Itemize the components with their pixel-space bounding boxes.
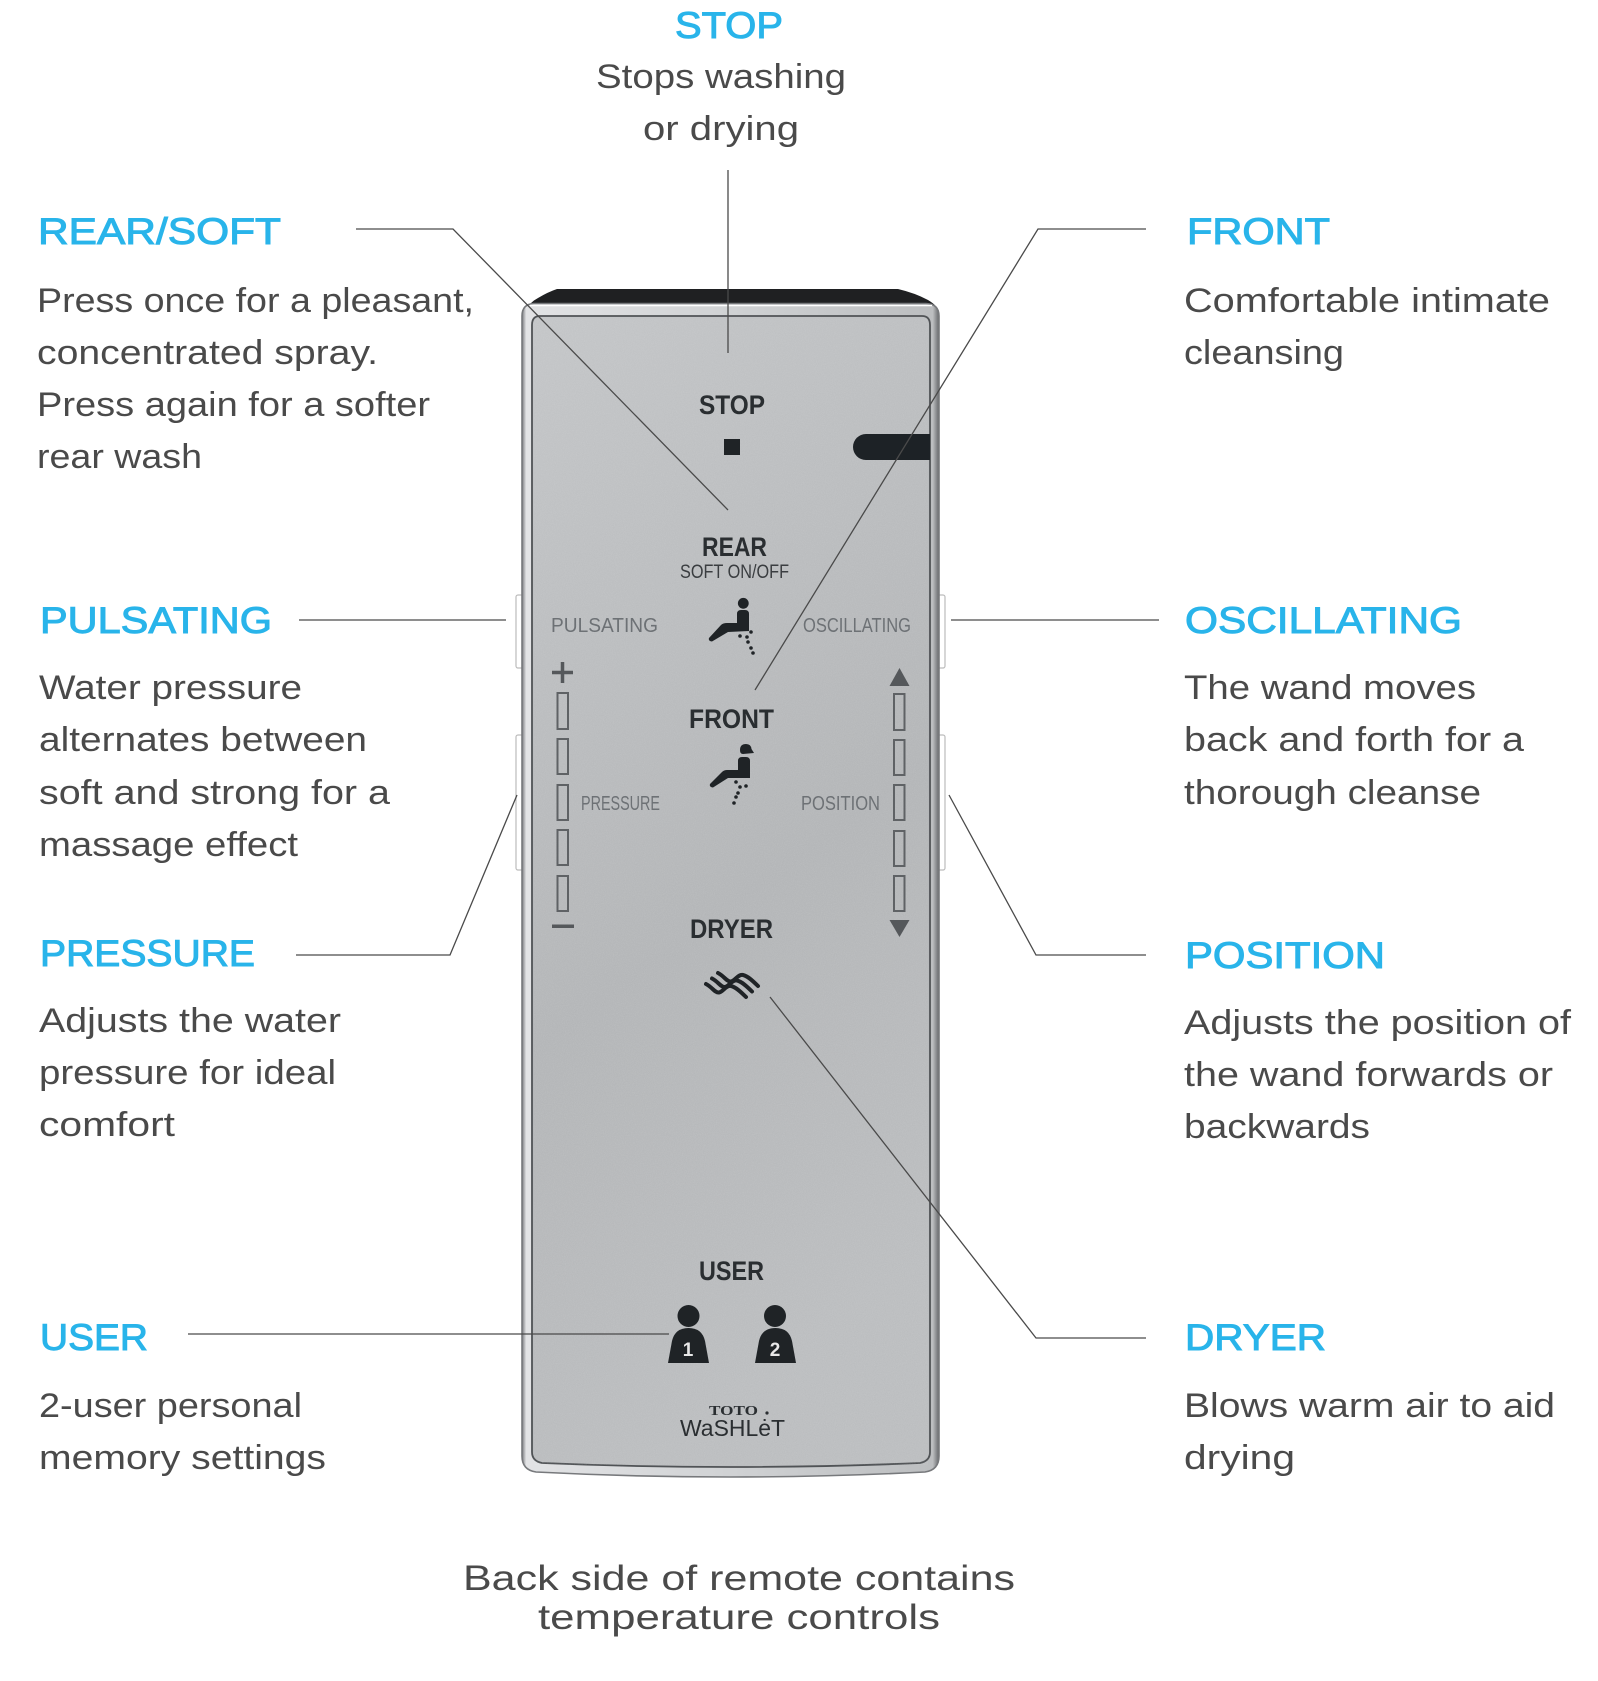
description: STOP: or drying: [643, 110, 799, 148]
heading: FRONT: FRONT: [1187, 211, 1330, 252]
callout: PRESSURE: [39, 933, 341, 1144]
heading: REAR/SOFT: REAR/SOFT: [38, 211, 281, 252]
heading: PRESSURE: PRESSURE: [40, 933, 255, 974]
remote label: PRESSURE: PRESSURE: [581, 793, 660, 815]
dark slider window: [853, 434, 930, 460]
leader line: DRYER: [770, 997, 1146, 1338]
side button: pulsating: [516, 595, 524, 668]
leader line: FRONT: [755, 229, 1146, 690]
description: DRYER: Blows warm air to aid: [1184, 1387, 1555, 1425]
description: PRESSURE: pressure for ideal: [39, 1054, 336, 1092]
description: PULSATING: massage effect: [39, 826, 299, 864]
callout: REAR/SOFT: [37, 211, 474, 476]
heading: USER: USER: [40, 1317, 148, 1358]
description: OSCILLATING: back and forth for a: [1184, 721, 1524, 759]
description: PULSATING: Water pressure: [39, 669, 302, 707]
description: OSCILLATING: [1184, 669, 1524, 812]
stop button icon: [724, 439, 740, 455]
description: PULSATING: alternates between: [39, 721, 367, 759]
description: REAR/SOFT: [37, 282, 474, 476]
description: PRESSURE: Adjusts the water: [39, 1002, 341, 1040]
callout: FRONT: [1184, 211, 1550, 372]
logo: TOTO Washlet: TOTO: [709, 1404, 758, 1419]
logo: TOTO Washlet: WaSHLėT: [680, 1415, 785, 1441]
icon: down arrow: [890, 920, 910, 937]
icon: minus: [552, 924, 574, 928]
heading: DRYER: DRYER: [1185, 1317, 1326, 1358]
heading: PULSATING: PULSATING: [40, 600, 272, 641]
description: STOP: [596, 58, 846, 148]
side button: oscillating: [937, 595, 945, 668]
remote body bezel: [522, 304, 939, 1477]
remote label: FRONT: FRONT: [689, 704, 774, 734]
description: POSITION: backwards: [1184, 1108, 1370, 1146]
icon: plus: [552, 662, 573, 683]
description: USER: memory settings: [39, 1439, 326, 1477]
description: USER: 2-user personal: [39, 1387, 302, 1425]
description: FRONT: Comfortable intimate: [1184, 282, 1550, 320]
footer note: [463, 1559, 1015, 1637]
icon: front wash seated figure: [710, 744, 754, 805]
callout: POSITION: [1184, 935, 1572, 1146]
description: PRESSURE: comfort: [39, 1106, 176, 1144]
callout: USER: [39, 1317, 326, 1477]
heading: POSITION: POSITION: [1185, 935, 1385, 976]
description: POSITION: the wand forwards or: [1184, 1056, 1553, 1094]
leader line: STOP: [727, 170, 729, 353]
description: REAR/SOFT: Press once for a pleasant,: [37, 282, 474, 320]
callout: DRYER: [1184, 1317, 1555, 1477]
leader line: POSITION: [949, 795, 1146, 955]
description: STOP: Stops washing: [596, 58, 846, 96]
icon: user 1: 1: [683, 1340, 694, 1361]
leader line: PULSATING: [299, 619, 506, 621]
leader line: REAR/SOFT: [356, 229, 728, 510]
description: FRONT: [1184, 282, 1550, 372]
leader line: OSCILLATING: [951, 619, 1159, 621]
remote label: DRYER: DRYER: [690, 914, 773, 944]
remote label: STOP: STOP: [699, 390, 765, 420]
bezel top highlight: [530, 304, 932, 306]
description: USER: [39, 1387, 326, 1477]
remote label: SOFT ON/OFF: SOFT ON/OFF: [680, 562, 789, 583]
description: PULSATING: soft and strong for a: [39, 774, 390, 812]
description: FRONT: cleansing: [1184, 334, 1344, 372]
description: REAR/SOFT: concentrated spray.: [37, 334, 378, 372]
callout: OSCILLATING: [1184, 600, 1524, 812]
description: OSCILLATING: The wand moves: [1184, 669, 1476, 707]
leader line: USER: [188, 1333, 669, 1335]
remote control: [516, 289, 945, 1477]
remote label: OSCILLATING: OSCILLATING: [803, 615, 911, 637]
side button: position: [937, 735, 945, 870]
remote label: USER: USER: [699, 1256, 764, 1286]
panel speckle texture: [534, 319, 928, 1465]
description: PRESSURE: [39, 1002, 341, 1144]
description: REAR/SOFT: rear wash: [37, 438, 202, 476]
description: PULSATING: [39, 669, 390, 864]
icon: user 2: 2: [770, 1340, 780, 1361]
leader line: PRESSURE: [296, 795, 517, 955]
remote top dark edge: [524, 289, 939, 312]
side button: pressure: [516, 735, 524, 870]
icon: up arrow: [890, 668, 910, 686]
heading: OSCILLATING: OSCILLATING: [1185, 600, 1462, 641]
icon: rear wash seated figure: [709, 598, 755, 655]
icon: dryer waves: [706, 973, 758, 997]
remote label: REAR: REAR: [702, 532, 767, 562]
description: DRYER: drying: [1184, 1439, 1295, 1477]
description: REAR/SOFT: Press again for a softer: [37, 386, 430, 424]
remote label: PULSATING: PULSATING: [551, 615, 658, 637]
remote label: POSITION: POSITION: [801, 793, 880, 815]
heading: STOP: STOP: [675, 5, 783, 46]
remote face panel: [532, 316, 930, 1467]
icon: user 2: [755, 1305, 796, 1363]
callout: PULSATING: [39, 600, 390, 864]
pressure level bars: [558, 693, 568, 911]
description: DRYER: [1184, 1387, 1555, 1477]
footer note: temperature controls: [538, 1598, 940, 1637]
description: POSITION: Adjusts the position of: [1184, 1004, 1572, 1042]
description: POSITION: [1184, 1004, 1572, 1146]
callout: STOP: [596, 5, 846, 148]
icon: user 1: [668, 1305, 709, 1363]
description: OSCILLATING: thorough cleanse: [1184, 774, 1481, 812]
footer note: Back side of remote contains: [463, 1559, 1015, 1598]
position level bars: [894, 694, 904, 911]
